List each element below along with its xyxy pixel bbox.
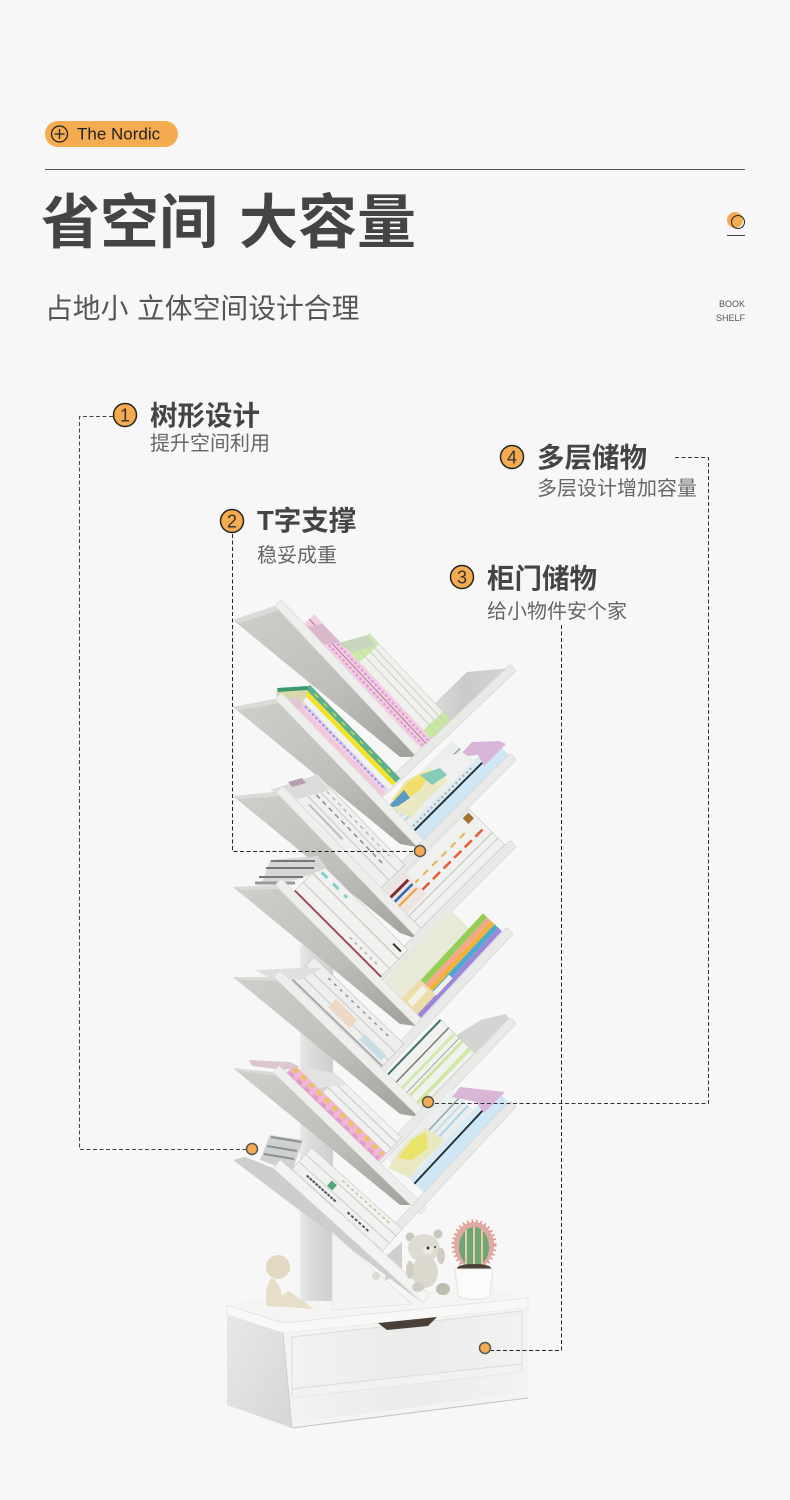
label: book shelf: BOOK (719, 299, 745, 309)
callout 2: T字支撑: T字支撑 (257, 505, 356, 536)
books on shelf 6 (286, 1049, 401, 1162)
shelf 1 edges (275, 600, 424, 758)
callout 1: 树形设计 (80, 400, 270, 1154)
shelf level 7 (233, 1135, 430, 1310)
shelf level 5 (233, 957, 516, 1164)
callout 1: 树形设计: 1 (120, 406, 130, 426)
subtitle: 立体空间设计合理 (137, 293, 359, 324)
books on shelf 4 right (382, 896, 502, 1019)
shelf 5 edges (274, 971, 426, 1117)
callout 2: T字支撑 (220, 505, 426, 856)
title: 大容量 (239, 190, 416, 256)
shelf level 4 (233, 856, 513, 1072)
shelf 3 edges (276, 786, 425, 939)
title: 省空间 (41, 190, 218, 256)
shelf level 1 (233, 596, 516, 801)
stacked books on shelf 7 (260, 1135, 303, 1172)
shelf 6 edges (273, 1066, 427, 1214)
callout 1: 树形设计: 提升空间利用 (150, 432, 270, 455)
callout 4: 多层储物: 多层储物 (537, 442, 647, 473)
teddy bear (406, 1230, 450, 1295)
books on shelf 3 right (386, 809, 504, 928)
stacked books on shelf 4 (255, 856, 327, 883)
books on shelf 4 (294, 864, 408, 978)
icon: overlapping circles (727, 212, 745, 236)
callout 4: 多层储物: 4 (507, 448, 517, 468)
books on shelf 2 (291, 685, 400, 796)
shelf level 6 (233, 1049, 516, 1253)
triangular T support (332, 1232, 412, 1310)
tag: The Nordic: The Nordic (77, 124, 161, 144)
books on shelf 5 right (383, 983, 510, 1112)
callout 3: 柜门储物: 柜门储物 (487, 563, 597, 594)
books on shelf 2 right (386, 719, 509, 842)
cactus in white pot (453, 1221, 495, 1300)
callout 4: 多层储物: 多层设计增加容量 (537, 477, 697, 500)
shelf 7 edge (273, 1160, 430, 1303)
figurine (266, 1255, 314, 1309)
callout 3: 柜门储物 (450, 563, 627, 1354)
subtitle: 占地小 (45, 293, 128, 324)
callout 1: 树形设计: 树形设计 (150, 400, 260, 431)
books on shelf 1 (304, 596, 455, 753)
books on shelf 6 right (387, 1068, 508, 1193)
shelf level 2 (233, 685, 516, 893)
support bracket knob (372, 1272, 380, 1280)
shelf 4 edges (275, 879, 423, 1026)
callout 3: 柜门储物: 给小物件安个家 (487, 600, 627, 623)
books on shelf 7 (292, 1148, 402, 1251)
label: book shelf: SHELF (716, 313, 745, 323)
callout 2: T字支撑: 稳妥成重 (257, 544, 337, 567)
central post (300, 945, 402, 1301)
callout 4: 多层储物 (422, 442, 708, 1108)
callout 3: 柜门储物: 3 (457, 568, 467, 588)
drawer base cabinet (227, 1289, 528, 1428)
books on shelf 5 (291, 957, 404, 1068)
shelf level 3 (233, 774, 516, 981)
callout 2: T字支撑: 2 (227, 512, 237, 532)
tag: The Nordic (45, 121, 178, 147)
tree bookshelf product (227, 596, 528, 1428)
books on shelf 3 (293, 774, 405, 888)
shelf 2 edges (275, 693, 424, 846)
